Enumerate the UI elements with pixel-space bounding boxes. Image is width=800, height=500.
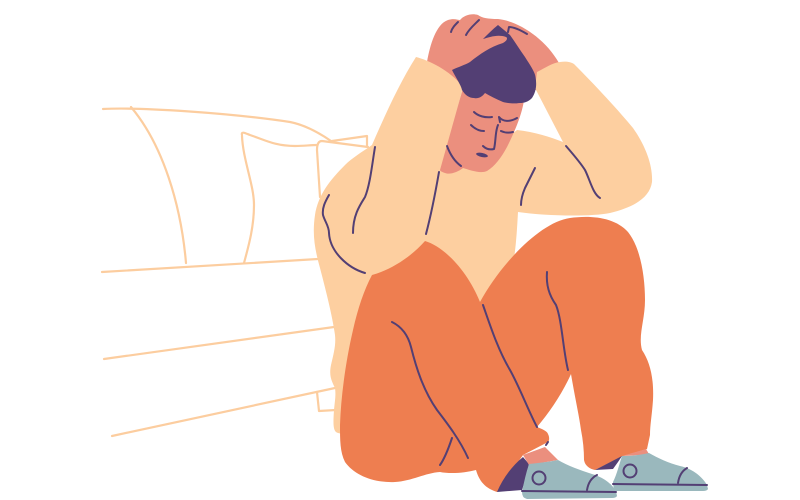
sole line and laces: [613, 464, 707, 485]
left shoe: [497, 447, 617, 499]
jaw: [447, 146, 461, 166]
right eyebrow: [499, 117, 517, 122]
nose: [483, 125, 498, 149]
sweater: body and arms: [314, 57, 652, 440]
left eyebrow: [474, 112, 492, 117]
hands on head: [427, 14, 559, 90]
hair: [452, 25, 536, 103]
left eye: [471, 125, 484, 131]
shoe body: [522, 460, 617, 499]
couch outline: [102, 107, 368, 436]
shoe body: [613, 453, 708, 491]
mouth: [476, 152, 488, 158]
ankle: [523, 447, 558, 465]
clothing and finger detail lines: [323, 20, 600, 465]
right shoe: [595, 449, 708, 491]
inner sole: [595, 456, 622, 470]
facial features: [447, 112, 517, 166]
ankle: [622, 449, 649, 456]
sole line and laces: [522, 472, 616, 492]
right eye: [501, 131, 513, 133]
inner sole: [497, 457, 529, 492]
pants: [340, 217, 653, 492]
face: [440, 88, 524, 174]
